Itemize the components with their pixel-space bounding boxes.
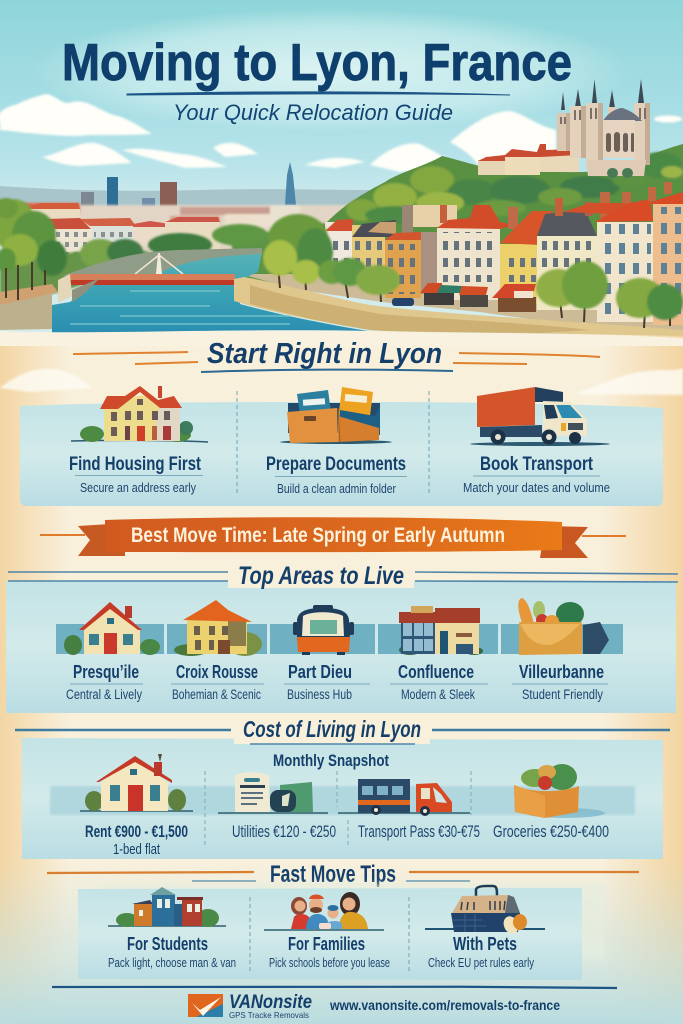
distant city [10, 203, 375, 260]
card: Find Housing First [69, 454, 203, 495]
hilltop buildings [478, 144, 579, 175]
street behind quay [240, 274, 683, 335]
icon: document box [280, 387, 392, 444]
card: Prepare Documents: Prepare Documents [266, 454, 406, 475]
bridge [58, 253, 235, 303]
area: Villeurbanne: Student Friendly [522, 687, 603, 702]
Fourvière basilica [557, 79, 650, 178]
tip: For Families [269, 934, 390, 970]
far towers [81, 162, 296, 212]
right quay wall [234, 277, 683, 336]
section: Cost of Living in Lyon [15, 716, 670, 859]
section: Top Areas to Live [6, 562, 678, 713]
website url: www.vanonsite.com/removals-to-france [329, 997, 560, 1013]
card: Book Transport: Match your dates and volume [463, 480, 610, 495]
subtitle: Your Quick Relocation Guide [173, 100, 453, 125]
tip: With Pets [428, 934, 534, 970]
riverside trees [263, 214, 683, 328]
label: transport pass: Transport Pass €30-€75 [358, 822, 480, 841]
icon: yellow house [71, 386, 208, 442]
tip: With Pets: Check EU pet rules early [428, 955, 534, 970]
logo tagline: GPS Tracke Removals [229, 1010, 309, 1020]
tip: For Students: Pack light, choose man & van [108, 955, 236, 970]
area: Croix Rousse [171, 662, 264, 702]
area: Croix Rousse: Croix Rousse [176, 662, 258, 682]
area: Part Dieu [284, 662, 370, 702]
area: Villeurbanne: Villeurbanne [519, 662, 604, 682]
heading: Start Right in Lyon: Start Right in Lyon [207, 338, 442, 370]
title: Moving to Lyon, France [62, 34, 572, 92]
panel: tips [78, 884, 605, 980]
card: Book Transport: Book Transport [480, 454, 594, 475]
mid ground greenery [0, 220, 345, 306]
banner: best move time: Best Move Time: Late Spring or Early Autumn [131, 524, 505, 547]
panel background [22, 738, 663, 859]
card: Prepare Documents [266, 454, 407, 496]
band [50, 786, 635, 815]
tip: For Students: For Students [127, 934, 208, 954]
icon: orange truck [470, 387, 610, 446]
icon: Confluence buildings [399, 606, 483, 655]
footer [52, 986, 617, 1020]
awnings [420, 283, 536, 312]
icon: grocery bag [514, 764, 605, 818]
label: groceries: Groceries €250-€400 [493, 822, 609, 841]
icon: Croix Rousse house [174, 600, 262, 656]
area: Confluence: Modern & Sleek [401, 687, 475, 702]
far embankment [62, 248, 262, 277]
clouds [0, 94, 682, 172]
area: Croix Rousse: Bohemian & Scenic [172, 687, 261, 702]
icon: student housing [108, 887, 226, 927]
left buildings [22, 203, 220, 272]
distant hills [0, 186, 375, 215]
icon: family [264, 892, 384, 930]
tip: For Families: For Families [288, 934, 365, 954]
dividers [205, 771, 471, 848]
banner: best move time [40, 517, 626, 558]
heading: Top Areas to Live [8, 562, 678, 590]
logo name: VANonsite [229, 992, 312, 1013]
logo mark [188, 994, 223, 1017]
label: rent: Rent €900 - €1,500 [85, 822, 188, 841]
parked car [392, 298, 414, 306]
icon: transport van [338, 779, 470, 816]
panel background [6, 581, 676, 713]
section: Start Right in Lyon [20, 338, 663, 506]
heading: Start Right in Lyon [73, 338, 600, 372]
heading: Cost of Living in Lyon [15, 716, 670, 744]
faint clouds on paper [0, 368, 683, 395]
tip: For Families: Pick schools before you lease [269, 955, 390, 970]
torn paper edge [0, 330, 683, 346]
section: Fast Move Tips [47, 861, 639, 980]
hero illustration: Lyon skyline [0, 0, 683, 336]
icon: pet carrier [425, 886, 545, 936]
area: Part Dieu: Business Hub [287, 687, 352, 702]
label: rent [85, 822, 188, 858]
river [52, 252, 375, 334]
area: Part Dieu: Part Dieu [288, 662, 352, 682]
heading: Cost of Living in Lyon: Cost of Living in Lyon [243, 716, 421, 742]
label: rent: 1-bed flat [113, 842, 160, 858]
hill with trees [318, 144, 683, 262]
area: Presqu'ile: Presqu’ile [73, 662, 139, 682]
left quay [0, 292, 52, 330]
card: Prepare Documents: Build a clean admin folder [277, 481, 397, 496]
icon: rent house [80, 754, 193, 811]
area: Confluence: Confluence [398, 662, 474, 682]
tip: With Pets: With Pets [453, 934, 517, 954]
panel: three first steps [20, 386, 663, 506]
area: Presqu'ile: Central & Lively [66, 687, 142, 702]
area: Villeurbanne [512, 662, 608, 702]
subheading: Monthly Snapshot: Monthly Snapshot [273, 751, 389, 770]
left tree group [0, 198, 67, 300]
title [62, 34, 572, 125]
icon: Part Dieu tram [293, 605, 354, 655]
heading: Fast Move Tips: Fast Move Tips [270, 861, 396, 888]
label: utilities: Utilities €120 - €250 [232, 822, 336, 841]
card: Find Housing First: Find Housing First [69, 454, 202, 475]
card: Book Transport [463, 454, 610, 495]
icon: Villeurbanne grocery bag [518, 598, 609, 655]
icon: utility bills [218, 772, 328, 813]
tip: For Students [108, 934, 236, 970]
picture bands [56, 624, 623, 654]
waterfront buildings [325, 182, 683, 325]
area: Presqu'ile [66, 662, 143, 702]
card: Find Housing First: Secure an address early [80, 480, 196, 495]
area: Confluence [390, 662, 488, 702]
icon: Presqu'ile house [64, 602, 160, 655]
heading: Top Areas to Live: Top Areas to Live [238, 562, 404, 590]
